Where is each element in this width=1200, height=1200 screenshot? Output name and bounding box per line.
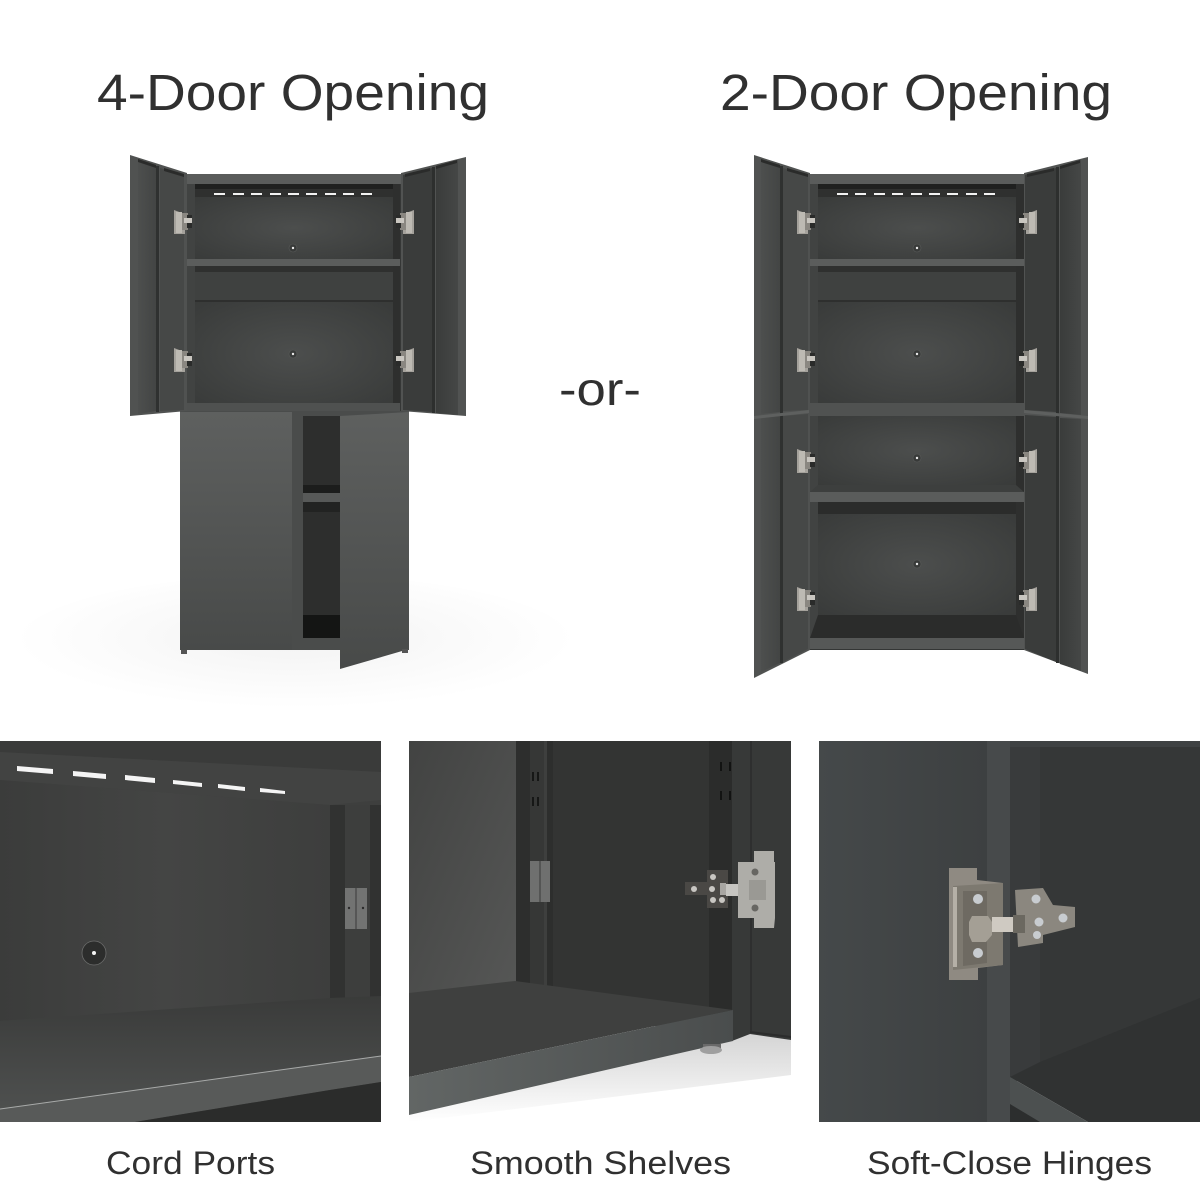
cable slots [837, 193, 995, 195]
cabinet: 4-door opening [130, 155, 466, 669]
column [516, 741, 554, 999]
slots [17, 766, 285, 794]
caption: soft-close hinges: Soft-Close Hinges [867, 1145, 1152, 1181]
caption: cord ports: Cord Ports [106, 1145, 275, 1181]
shelf top [409, 981, 733, 1077]
shelf front edge [0, 1056, 381, 1122]
cord ports [289, 244, 297, 358]
door hinge plate [949, 868, 1003, 980]
upper compartment [185, 174, 403, 412]
floor shadow [409, 1030, 791, 1122]
feet [181, 649, 408, 654]
closed lower-left door [180, 412, 292, 650]
shelf top [0, 996, 381, 1109]
left door [754, 155, 810, 678]
panel: soft-close hinges photo [819, 741, 1200, 1122]
left wall [409, 741, 516, 999]
side column [709, 741, 733, 1026]
left upper door [130, 155, 187, 416]
open lower-right door [340, 412, 409, 669]
inner frame [1010, 741, 1040, 1081]
text: or separator: -or- [559, 363, 641, 415]
hinge arm [685, 870, 740, 908]
mounting bracket [1015, 888, 1075, 947]
cable slots [214, 193, 372, 195]
door edge [732, 741, 791, 1041]
caption: smooth shelves: Smooth Shelves [470, 1145, 731, 1181]
cabinet: 2-door opening [754, 155, 1088, 678]
cord port [82, 941, 106, 965]
cord ports [913, 244, 921, 568]
shelf front edge [1010, 1077, 1088, 1122]
right side column [330, 805, 381, 1003]
shelf top [1010, 998, 1200, 1122]
butt hinge [530, 861, 550, 902]
back wall [553, 741, 709, 1026]
heading: 4-Door Opening: 4-Door Opening [97, 64, 489, 121]
door face [819, 741, 987, 1122]
panel: smooth shelves photo [409, 741, 791, 1122]
interior [808, 174, 1026, 650]
right upper door [401, 157, 466, 416]
hinge screws [973, 894, 983, 958]
hinges [797, 210, 1037, 611]
right door [1024, 157, 1088, 674]
lower compartment gap [180, 411, 409, 650]
back wall [1040, 747, 1200, 1067]
shelf front edge [409, 1010, 733, 1115]
back wall [0, 780, 330, 1021]
hinge link [992, 917, 1013, 932]
perforated rail [0, 752, 381, 805]
door frame [987, 741, 1010, 1122]
levelling foot [700, 1044, 722, 1054]
butt hinge [345, 888, 367, 929]
panel: cord ports photo [0, 741, 381, 1122]
heading: 2-Door Opening: 2-Door Opening [720, 64, 1112, 121]
hinges [174, 210, 414, 372]
ceiling band [0, 741, 381, 772]
door hinge plate [738, 851, 775, 928]
